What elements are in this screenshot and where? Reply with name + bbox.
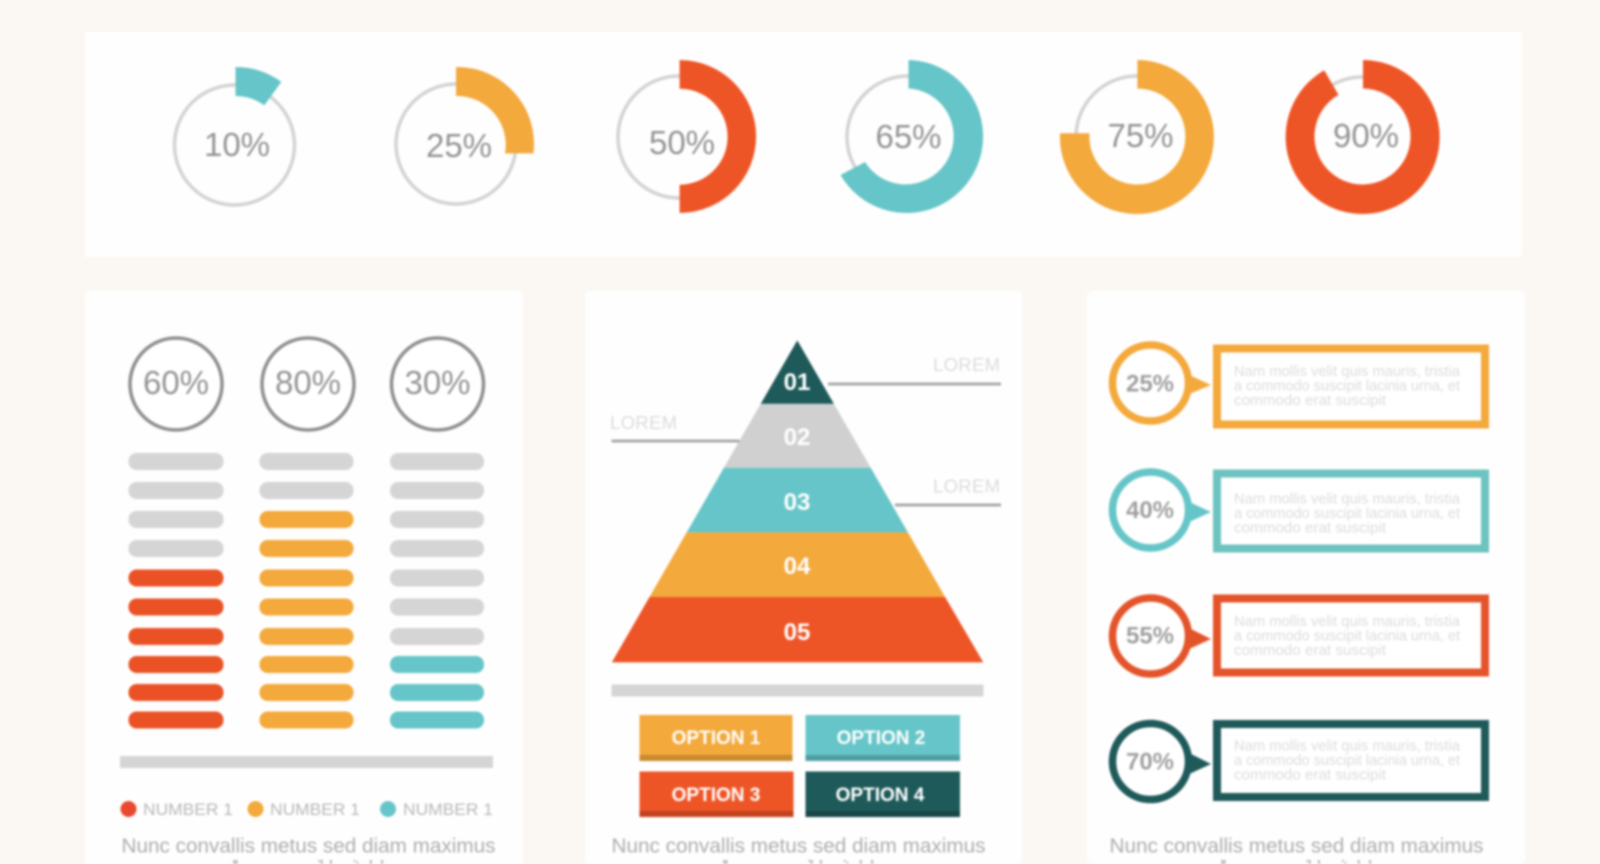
donut: 10%	[174, 67, 294, 205]
callout: 55%: 55%	[1126, 622, 1174, 650]
panel: percentage donuts	[85, 32, 1522, 257]
badge: 30%: 30%	[404, 364, 471, 401]
pyramid callout: left: LOREM	[610, 412, 677, 433]
callout: 70%: 70%	[1126, 748, 1174, 776]
callout: 55%: Nam mollis velit quis mauris, tristia	[1234, 614, 1461, 630]
option 3 button	[640, 772, 794, 817]
callout: 40%: a commodo suscipit lacinia urna, et	[1234, 506, 1460, 522]
legend: NUMBER 1	[403, 800, 493, 819]
callout: 70%: a commodo suscipit lacinia urna, et	[1234, 753, 1460, 769]
legend	[120, 800, 493, 819]
badge: 80%	[262, 338, 354, 430]
callout: 40%: 40%	[1126, 497, 1174, 524]
callout: 25%: Nam mollis velit quis mauris, tristia	[1234, 364, 1461, 380]
callout: 25%: 25%	[1126, 370, 1174, 398]
donut: 25%	[396, 67, 534, 204]
bar column: 60% red	[128, 453, 224, 728]
callout: 40%: commodo erat suscipit	[1234, 520, 1386, 536]
pyramid chart: 03	[784, 489, 810, 516]
caption text: Nunc convallis metus sed diam maximus	[1110, 836, 1484, 858]
badge: 30%	[392, 338, 484, 430]
pyramid chart: 05	[784, 619, 810, 646]
legend: NUMBER 1	[270, 800, 360, 819]
callout: 25%: a commodo suscipit lacinia urna, et	[1234, 378, 1460, 394]
donut: 75%	[1060, 60, 1214, 214]
pyramid callout: lower right	[895, 476, 1001, 506]
option 2 button: OPTION 2	[837, 728, 925, 749]
option 1 button	[640, 715, 792, 761]
badge: 60%	[130, 338, 222, 430]
donut: 90%	[1286, 60, 1440, 214]
callout: 40%	[1112, 472, 1485, 548]
option 1 button: OPTION 1	[672, 728, 761, 749]
panel: stacked bar columns	[85, 291, 523, 864]
option 4 button	[806, 772, 960, 817]
callout: 70%	[1112, 724, 1485, 800]
option 3 button: OPTION 3	[672, 785, 760, 806]
pyramid callout: top right: LOREM	[933, 354, 1000, 375]
pyramid chart: 01	[784, 369, 810, 396]
pyramid chart: 02	[784, 424, 810, 451]
pyramid chart	[612, 340, 983, 662]
callout: 70%: Nam mollis velit quis mauris, tristia	[1234, 738, 1461, 754]
bar column: 80% orange	[260, 453, 354, 728]
badge: 60%: 60%	[143, 364, 209, 401]
option 4 button: OPTION 4	[836, 785, 925, 806]
callout: 55%: commodo erat suscipit	[1234, 643, 1386, 659]
badge: 80%: 80%	[275, 364, 341, 401]
option 2 button	[806, 715, 960, 761]
donut: 90%: 90%	[1333, 117, 1399, 154]
callout: 25%	[1112, 345, 1485, 424]
caption text: Nunc convallis metus sed diam maximus	[612, 836, 986, 858]
callout: 55%	[1112, 598, 1485, 674]
callout: 70%: commodo erat suscipit	[1234, 768, 1386, 784]
legend: NUMBER 1	[143, 800, 233, 819]
pyramid chart: 04	[784, 553, 811, 580]
donut: 75%: 75%	[1107, 117, 1174, 154]
donut: 65%	[840, 60, 983, 213]
donut: 25%: 25%	[426, 127, 492, 164]
callout: 40%: Nam mollis velit quis mauris, tristia	[1234, 492, 1461, 508]
pyramid callout: top right	[828, 354, 1001, 386]
bar column: 30% teal	[390, 453, 484, 728]
pyramid callout: left	[610, 412, 740, 442]
donut: 65%: 65%	[875, 118, 942, 155]
caption text: Nunc convallis metus sed diam maximus	[122, 836, 496, 858]
panel: pyramid	[585, 291, 1022, 864]
callout: 25%: commodo erat suscipit	[1234, 393, 1386, 409]
pyramid callout: lower right: LOREM	[933, 476, 1000, 496]
donut: 50%	[618, 60, 756, 213]
donut: 50%: 50%	[649, 124, 715, 161]
panel: callout list	[1087, 291, 1525, 864]
callout: 55%: a commodo suscipit lacinia urna, et	[1234, 628, 1460, 644]
donut: 10%: 10%	[204, 126, 270, 163]
